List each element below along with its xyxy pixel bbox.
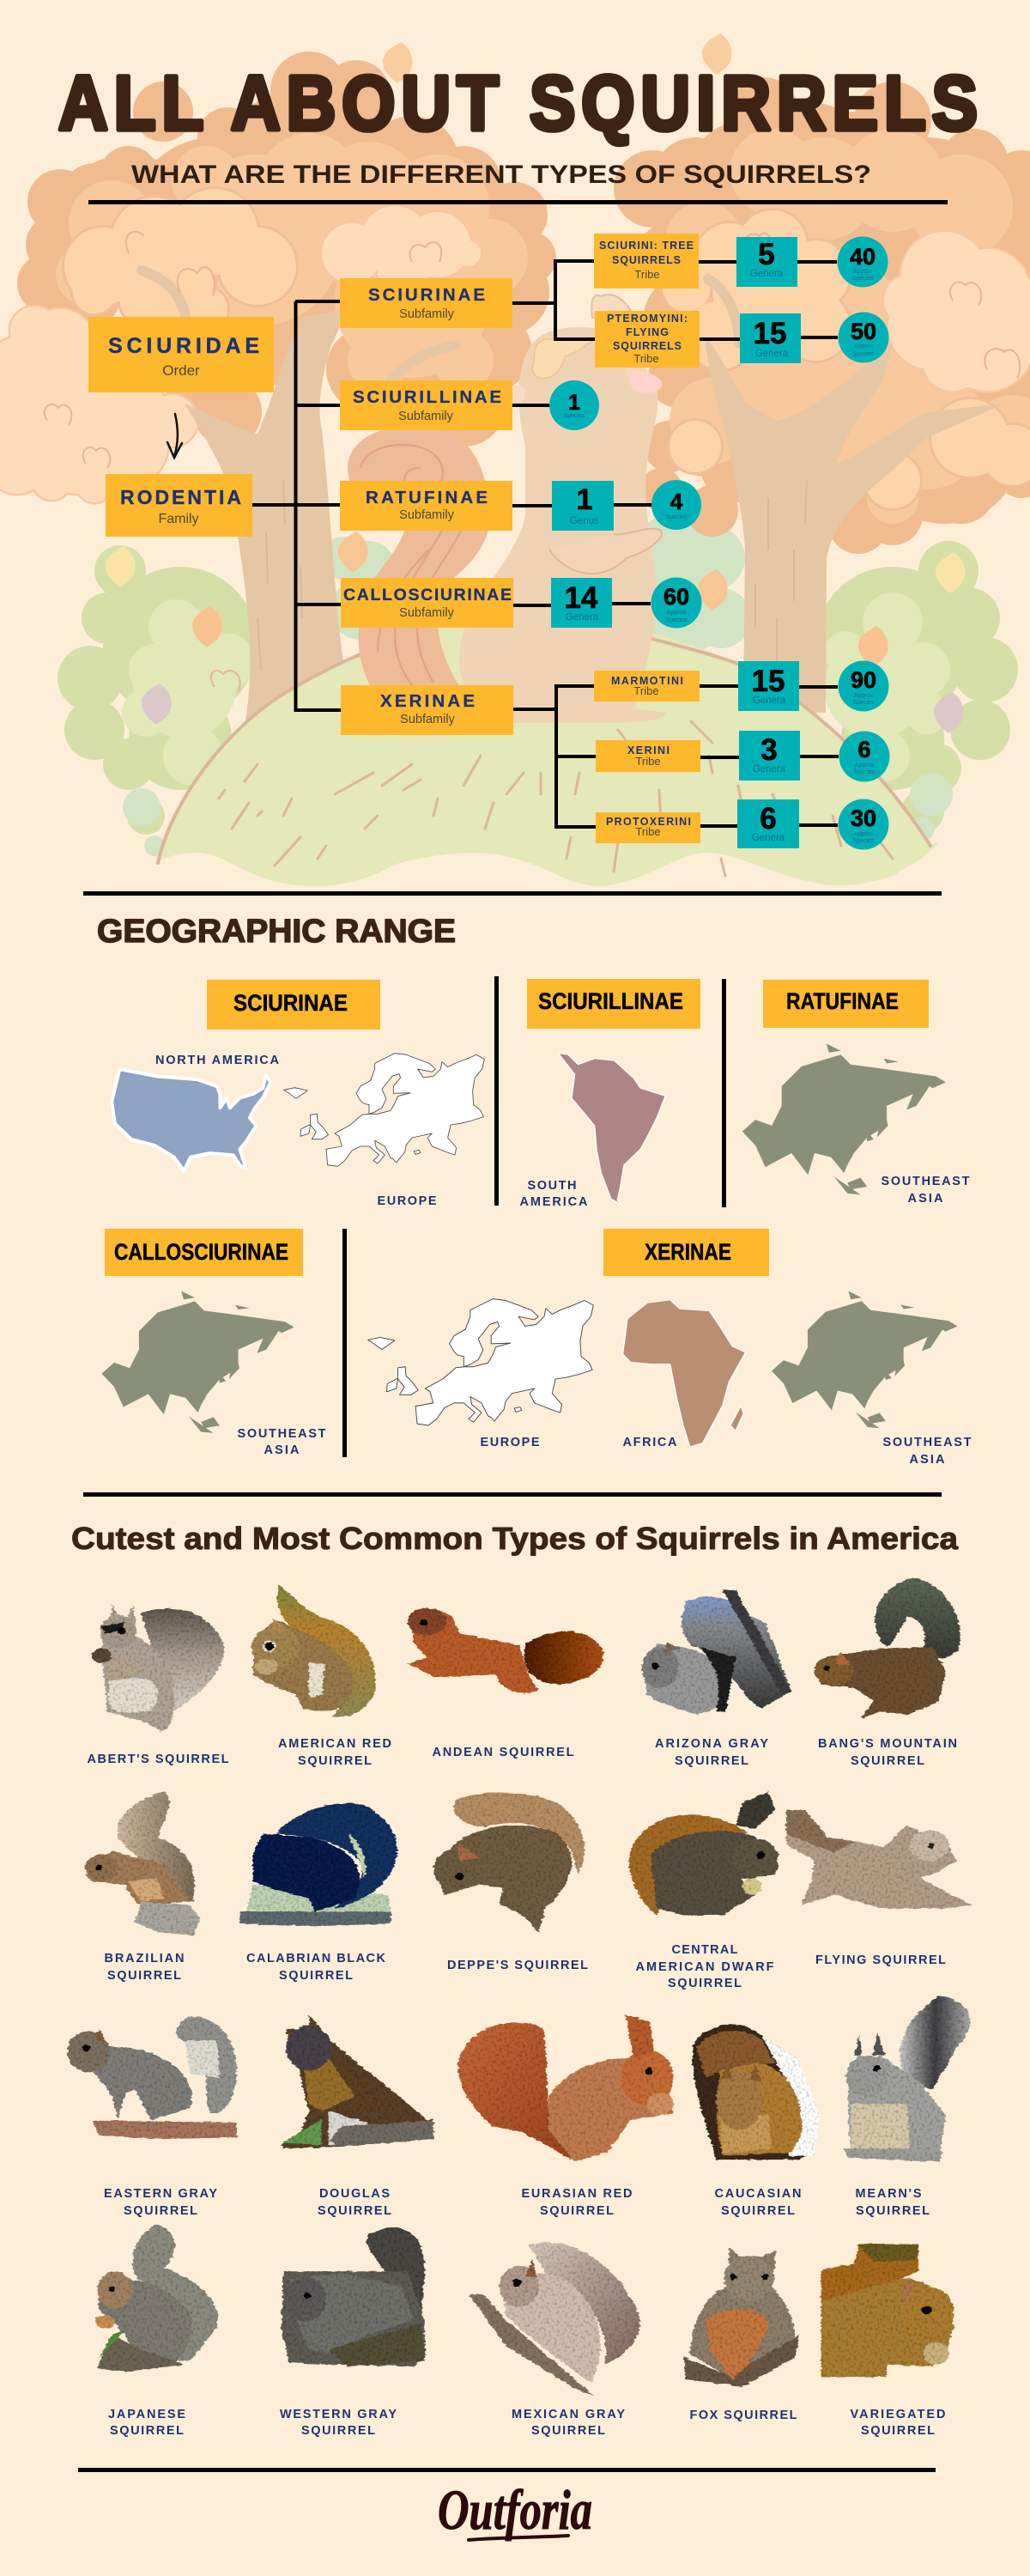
squirrel name labels: SQUIRREL	[675, 1754, 748, 1768]
squirrel name labels: EURASIAN RED	[522, 2187, 632, 2201]
squirrel name labels: SQUIRREL	[856, 2204, 930, 2218]
squirrel: Mearn's	[844, 1996, 970, 2161]
heading: geographic range: GEOGRAPHIC RANGE	[97, 914, 456, 950]
squirrel name labels: SQUIRREL	[318, 2204, 391, 2218]
map labels	[155, 1054, 972, 1467]
squirrel name labels: CENTRAL	[671, 1943, 738, 1957]
map labels: SOUTHEAST	[881, 1175, 970, 1188]
logo: Outforia: Outforia	[438, 2479, 592, 2542]
squirrel name labels: SQUIRREL	[851, 1754, 924, 1768]
box: Ratufinae range	[763, 980, 929, 1028]
count: 90 species: Approx	[854, 693, 874, 699]
box: Xerinae range: XERINAE	[645, 1239, 731, 1265]
box: Ratufinae: Subfamily	[399, 508, 455, 522]
map shapes	[102, 1043, 958, 1447]
box: Pteromyini tribe: SQUIRRELS	[613, 340, 682, 352]
count: 6 species: 6	[857, 737, 871, 762]
box: Pteromyini tribe: PTEROMYINI:	[607, 313, 688, 325]
count: 5 genera: Genera	[750, 269, 784, 279]
box: Sciurinae: Subfamily	[399, 307, 455, 321]
count: 6 species: Species	[854, 769, 876, 775]
count: 14 genera	[551, 578, 612, 628]
squirrel name labels: JAPANESE	[108, 2408, 185, 2421]
connector lines	[252, 259, 839, 829]
map labels: EUROPE	[481, 1436, 540, 1449]
count: 3 genera: 3	[760, 733, 778, 767]
box: Rodentia family	[106, 474, 252, 537]
squirrel: Eastern gray	[68, 2016, 237, 2139]
squirrel: Eurasian red	[458, 2014, 673, 2161]
squirrel name labels: SQUIRREL	[279, 1969, 353, 1983]
squirrel: Flying	[786, 1810, 972, 1909]
count: 1 species: 1	[568, 391, 580, 415]
squirrel: Japanese	[95, 2225, 218, 2372]
box: Sciuridae order: Order	[162, 362, 200, 379]
count: 1 genus: 1	[577, 483, 592, 516]
count: 1 species: Species	[564, 413, 585, 419]
squirrel: Western gray	[282, 2227, 426, 2366]
map labels: SOUTHEAST	[237, 1427, 326, 1441]
box: Callosciurinae: Subfamily	[399, 606, 455, 620]
count: 3 genera: Genera	[753, 764, 786, 775]
box: Sciuridae order: SCIURIDAE	[108, 334, 259, 358]
count: 40 species: 40	[850, 244, 876, 270]
map labels: EUROPE	[378, 1194, 437, 1208]
squirrel name labels: SQUIRREL	[540, 2204, 614, 2218]
box: Marmotini tribe: MARMOTINI	[611, 675, 683, 687]
box: Protoxerini tribe	[596, 812, 700, 843]
box: Sciurillinae	[340, 380, 512, 430]
count: 4 species: Species	[666, 514, 688, 520]
count: 50 species	[838, 313, 889, 362]
count: 30 species: Species	[853, 838, 875, 844]
count: 1 genus	[552, 481, 614, 531]
box: Ratufinae	[340, 481, 512, 531]
box: Pteromyini tribe: Tribe	[633, 352, 659, 365]
taxonomy tree	[88, 234, 889, 850]
count: 30 species: Approx	[854, 831, 874, 837]
count: 5 genera: 5	[758, 238, 775, 271]
box: Xerini tribe: Tribe	[635, 755, 661, 768]
map labels: SOUTH	[527, 1179, 577, 1193]
squirrel: Fox	[683, 2247, 800, 2387]
count: 15 genera: Genera	[755, 349, 789, 359]
box: Xerinae range	[603, 1229, 769, 1276]
box: Sciurinae: SCIURINAE	[368, 285, 485, 305]
box: Xerinae: XERINAE	[380, 691, 475, 711]
box: Ratufinae: RATUFINAE	[366, 488, 488, 507]
squirrel name labels: ANDEAN SQUIRREL	[433, 1746, 574, 1759]
squirrel name labels: VARIEGATED	[850, 2408, 946, 2421]
count: 90 species: Species	[853, 700, 875, 706]
squirrel name labels: AMERICAN RED	[278, 1737, 391, 1751]
squirrel name labels: MEXICAN GRAY	[512, 2408, 625, 2421]
count: 14 genera: Genera	[566, 612, 599, 623]
squirrel name labels: MEARN'S	[855, 2187, 922, 2201]
box: Sciurillinae range	[527, 979, 700, 1029]
box: Sciurini tribe: Tribe	[634, 268, 660, 281]
count: 4 species: 4	[670, 489, 683, 514]
count: 15 genera: 15	[754, 317, 786, 350]
squirrels: rows one and two	[85, 1577, 972, 1935]
box: Callosciurinae range	[105, 1229, 303, 1276]
map labels: SOUTHEAST	[882, 1436, 972, 1449]
box: Rodentia family: RODENTIA	[120, 486, 241, 508]
squirrel: Caucasian	[693, 2025, 820, 2160]
squirrel name labels: EASTERN GRAY	[104, 2187, 217, 2201]
squirrel: Calabrian black	[239, 1803, 397, 1926]
box: Sciurillinae range: SCIURILLINAE	[538, 988, 683, 1014]
squirrel: Variegated	[821, 2245, 954, 2377]
count: 60 species: Approx	[667, 610, 687, 616]
box: Xerinae	[341, 685, 513, 735]
map labels: AMERICA	[520, 1195, 588, 1209]
map labels: ASIA	[910, 1453, 945, 1467]
squirrel name labels: DOUGLAS	[319, 2187, 390, 2201]
title: ALL ABOUT SQUIRRELS	[58, 60, 978, 146]
box: Rodentia family: Family	[158, 512, 199, 526]
squirrel: Deppe's	[433, 1793, 585, 1932]
icon: arrow	[167, 414, 182, 458]
box: Marmotini tribe: Tribe	[633, 684, 659, 697]
subtitle: WHAT ARE THE DIFFERENT TYPES OF SQUIRRELS?	[131, 161, 871, 189]
count: 14 genera: 14	[565, 581, 598, 615]
map labels: AFRICA	[623, 1436, 677, 1449]
box: Protoxerini tribe: PROTOXERINI	[606, 816, 691, 828]
box: Xerinae: Subfamily	[400, 713, 456, 726]
count: 6 species	[839, 732, 889, 781]
count: 6 species: Approx	[855, 762, 875, 769]
count: 4 species	[651, 480, 701, 530]
squirrel: Andean	[407, 1608, 603, 1693]
squirrel name labels: SQUIRREL	[531, 2424, 605, 2438]
count: 15 genera	[738, 661, 799, 711]
box: Callosciurinae: CALLOSCIURINAE	[343, 586, 512, 605]
map labels: ASIA	[908, 1192, 943, 1206]
panel: geographic range maps	[102, 976, 972, 1467]
count: 1 genus: Genus	[570, 516, 599, 526]
squirrel name labels: WESTERN GRAY	[280, 2408, 397, 2421]
box: Sciurillinae: SCIURILLINAE	[353, 387, 501, 407]
squirrel: Bang's mountain	[815, 1577, 960, 1718]
count: 50 species: Species	[853, 351, 875, 357]
count: 50 species: Approx	[854, 343, 874, 349]
squirrel name labels: CAUCASIAN	[714, 2187, 802, 2201]
box: Ratufinae range: RATUFINAE	[786, 988, 899, 1014]
squirrel name labels: SQUIRREL	[668, 1977, 742, 1990]
illustration: autumn trees, bushes and squirrel background	[0, 33, 1030, 886]
count: 90 species	[838, 661, 889, 711]
count: 15 genera: 15	[752, 665, 785, 698]
box: Pteromyini tribe	[595, 311, 700, 368]
box: Sciuridae order	[88, 317, 274, 392]
count: 40 species	[838, 237, 888, 287]
squirrels: rows three and four	[68, 1996, 970, 2397]
count: 15 genera: Genera	[753, 696, 786, 706]
squirrel name labels: SQUIRREL	[861, 2424, 935, 2438]
squirrel name labels: SQUIRREL	[298, 1754, 372, 1768]
box: Protoxerini tribe: Tribe	[635, 825, 661, 838]
squirrel: Douglas	[282, 2014, 433, 2148]
count: 40 species: Species	[852, 276, 874, 282]
box: Callosciurinae	[341, 578, 513, 628]
squirrel name labels: FOX SQUIRREL	[690, 2409, 797, 2422]
box: Sciurillinae: Subfamily	[398, 410, 454, 423]
count: 3 genera	[739, 731, 800, 781]
count: 40 species: Approx	[853, 269, 873, 275]
box: Sciurinae	[340, 278, 512, 328]
heading: cutest squirrels: Cutest and Most Common Types of Squirrels in America	[71, 1521, 959, 1556]
box: Sciurini tribe: SCIURINI: TREE	[599, 240, 694, 252]
squirrel name labels: CALABRIAN BLACK	[246, 1952, 386, 1965]
count: 6 genera: 6	[760, 802, 777, 835]
count: 30 species	[838, 799, 889, 850]
squirrel: Abert's	[92, 1603, 225, 1732]
map labels: NORTH AMERICA	[155, 1054, 280, 1067]
squirrel name labels: SQUIRREL	[721, 2204, 795, 2218]
squirrel name labels: DEPPE'S SQUIRREL	[447, 1959, 588, 1972]
box: Pteromyini tribe: FLYING	[626, 326, 669, 338]
squirrel name labels	[88, 1737, 957, 2438]
box: Callosciurinae range: CALLOSCIURINAE	[114, 1239, 288, 1265]
count: 5 genera	[736, 237, 797, 287]
squirrel name labels: SQUIRREL	[124, 2204, 197, 2218]
box: Sciurinae range: SCIURINAE	[233, 990, 348, 1016]
squirrel name labels: BRAZILIAN	[105, 1952, 184, 1965]
count: 30 species: 30	[851, 805, 876, 831]
squirrel name labels: BANG'S MOUNTAIN	[818, 1737, 957, 1751]
squirrel name labels: FLYING SQUIRREL	[815, 1953, 946, 1967]
box: Sciurini tribe: SQUIRRELS	[612, 254, 681, 266]
count: 60 species: Species	[666, 617, 688, 623]
squirrel: American red	[251, 1584, 376, 1717]
count: 60 species: 60	[663, 584, 689, 610]
count: 1 species	[549, 380, 599, 430]
count: 6 genera	[737, 799, 799, 848]
count: 60 species	[651, 577, 702, 629]
count: 6 genera: Genera	[752, 833, 785, 843]
count: 50 species: 50	[851, 319, 876, 344]
squirrel name labels: AMERICAN DWARF	[635, 1960, 774, 1974]
squirrel name labels: ARIZONA GRAY	[655, 1737, 768, 1751]
squirrel name labels: SQUIRREL	[107, 1969, 181, 1983]
box: Xerini tribe: XERINI	[627, 744, 670, 756]
box: Xerini tribe	[596, 740, 700, 772]
box: Sciurinae range	[207, 980, 380, 1030]
squirrel name labels: SQUIRREL	[301, 2424, 375, 2438]
map labels: ASIA	[264, 1443, 300, 1457]
squirrel name labels: SQUIRREL	[110, 2424, 184, 2438]
squirrel: Central American dwarf	[629, 1791, 779, 1916]
squirrel: Arizona gray	[642, 1590, 791, 1715]
box: Marmotini tribe	[594, 671, 700, 702]
box: Sciurini tribe	[594, 234, 699, 289]
squirrel name labels: ABERT'S SQUIRREL	[88, 1753, 229, 1766]
squirrel: Mexican gray	[470, 2242, 639, 2397]
squirrel: Brazilian	[85, 1791, 200, 1935]
count: 15 genera	[740, 313, 801, 363]
count: 90 species: 90	[851, 667, 876, 693]
